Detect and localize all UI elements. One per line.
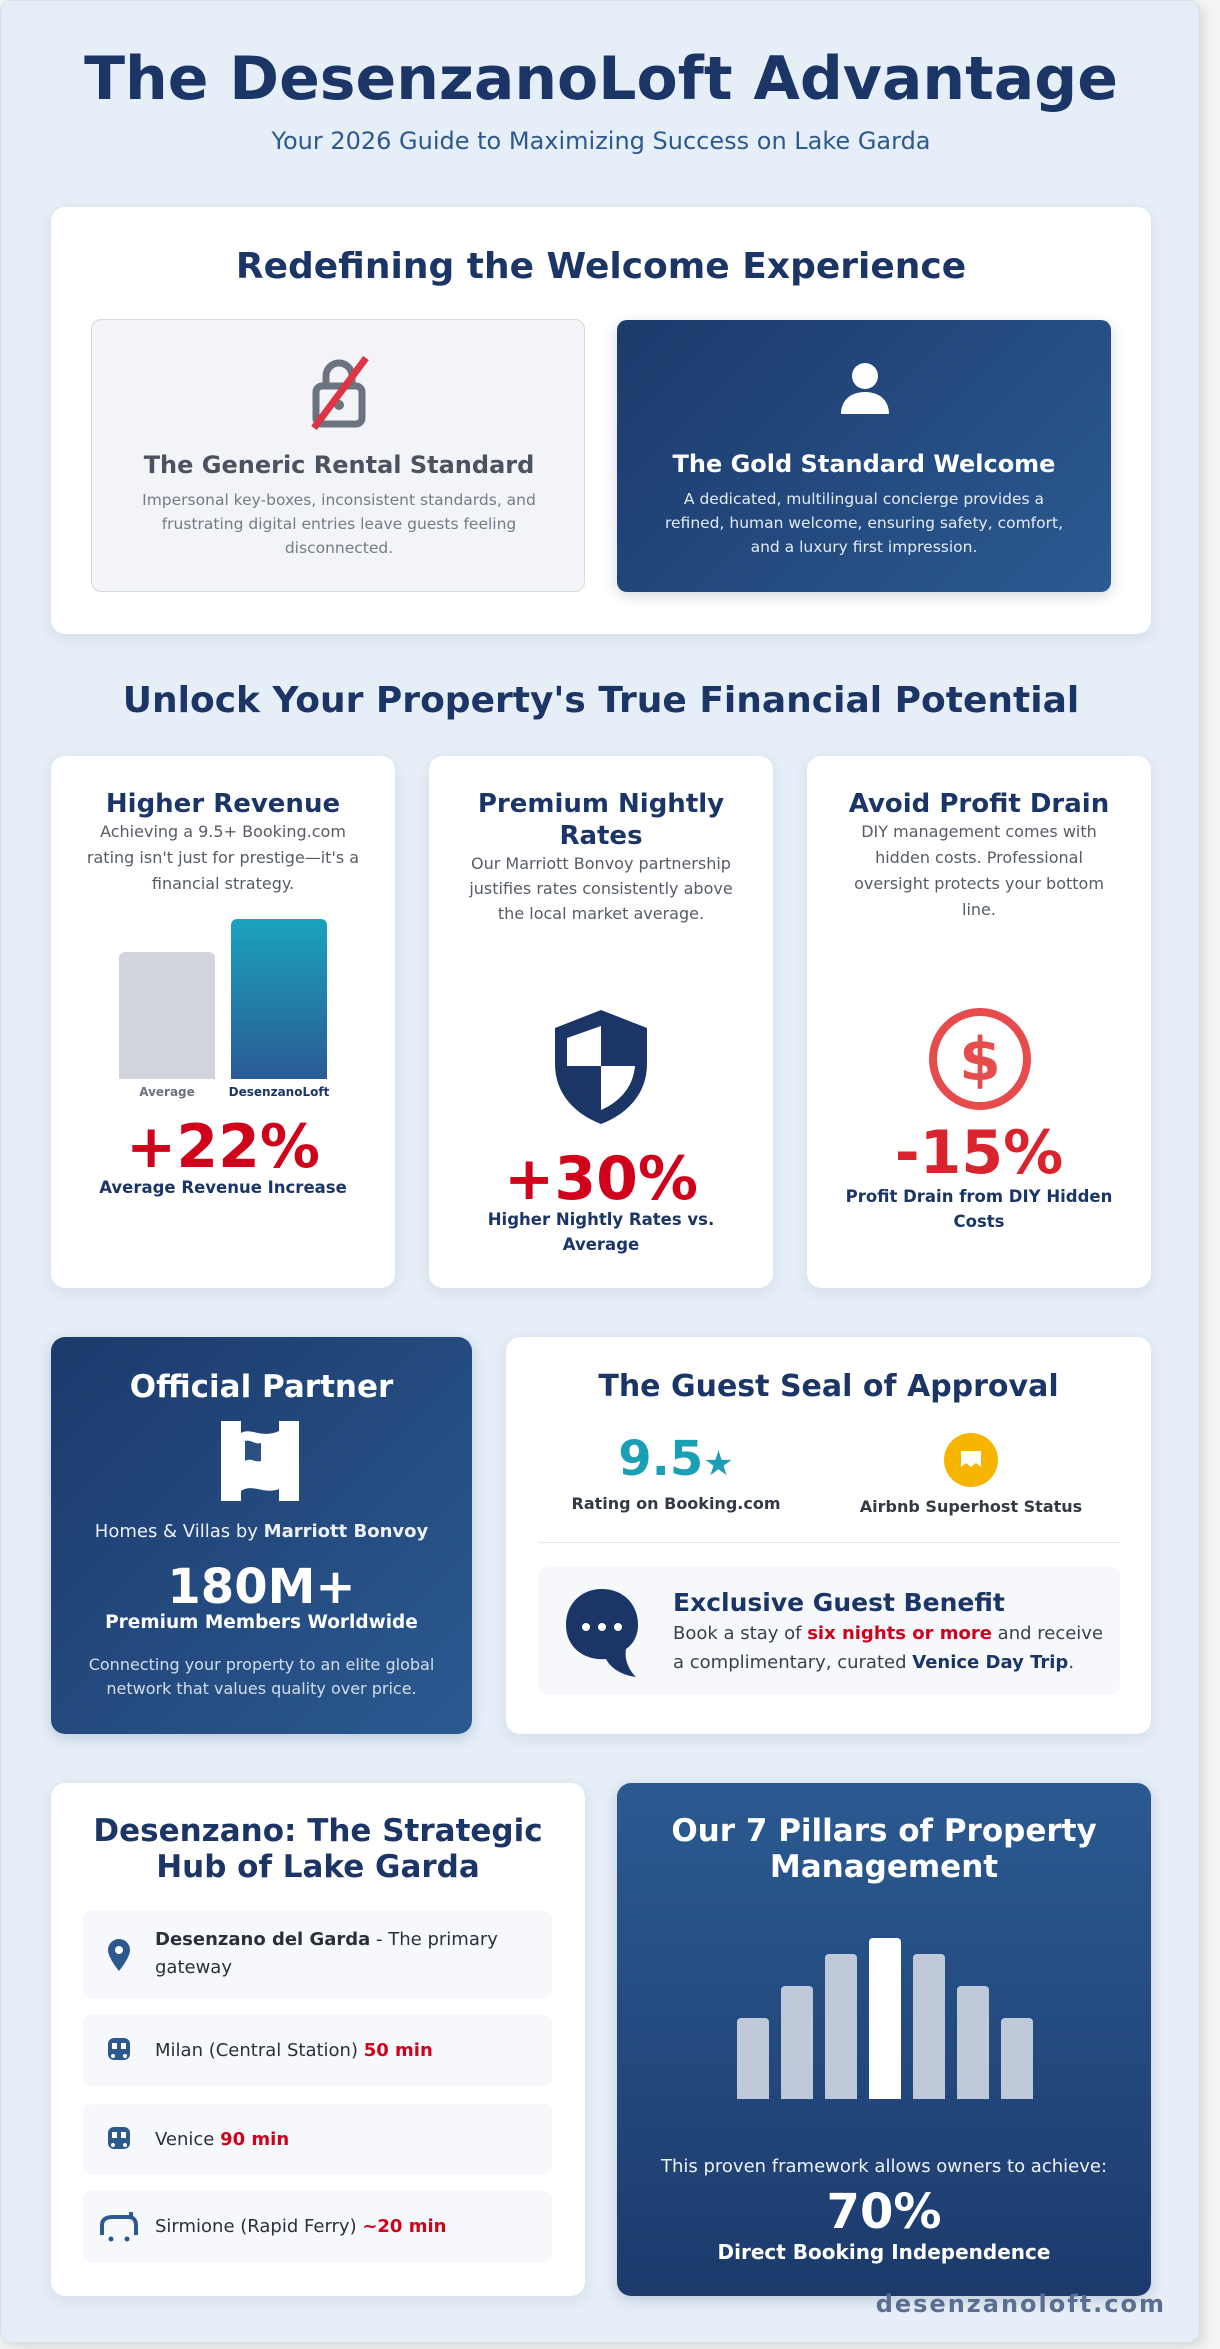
item: desenzano: Desenzano del Garda - The primary gateway (155, 1929, 498, 1978)
subtitle: Your 2026 Guide to Maximizing Success on Lake Garda (271, 127, 931, 155)
panel: official partner (51, 1337, 472, 1734)
icon: person (841, 363, 889, 414)
stat: 180M+: 180M+ (167, 1559, 356, 1615)
item: sirmione (83, 2191, 552, 2263)
heading: The Guest Seal of Approval (598, 1369, 1059, 1404)
text: Book a stay of six nights or more and receive a complimentary, curated Venice Day Trip. (673, 1623, 1103, 1673)
item: sirmione: Sirmione (Rapid Ferry) ~20 min (155, 2216, 446, 2237)
caption: Profit Drain from DIY Hidden Costs (846, 1187, 1112, 1231)
heading: Our 7 Pillars of Property Management (671, 1813, 1097, 1885)
bar chart: DesenzanoLoft (229, 1085, 329, 1099)
item: venice (83, 2104, 552, 2175)
icon: shield (555, 1010, 647, 1124)
text: Achieving a 9.5+ Booking.com rating isn't just for prestige—it's a financial strategy. (87, 822, 359, 893)
bar chart: Average (139, 1085, 195, 1099)
title: The DesenzanoLoft Advantage (84, 44, 1118, 114)
icon: dollar (929, 1008, 1031, 1110)
callout: exclusive benefit (538, 1567, 1120, 1695)
caption: Direct Booking Independence (718, 2240, 1050, 2264)
panel: avoid profit drain (807, 756, 1151, 1288)
heading: Desenzano: The Strategic Hub of Lake Garda (93, 1813, 543, 1885)
heading: Premium Nightly Rates (478, 789, 724, 851)
text: marriott: Homes & Villas by Marriott Bonvoy (95, 1521, 428, 1542)
panel: higher revenue (51, 756, 395, 1288)
text: Connecting your property to an elite global network that values quality over price. (89, 1655, 434, 1698)
heading: gold: The Gold Standard Welcome (673, 450, 1055, 478)
text: DIY management comes with hidden costs. Professional oversight protects your bottom line. (854, 822, 1104, 919)
panel: guest seal (506, 1337, 1151, 1734)
panel: 7 pillars (617, 1783, 1151, 2296)
rating (572, 1431, 780, 1513)
rating: 9.5★ (618, 1431, 734, 1487)
stat: -15% (895, 1118, 1063, 1188)
text: gold: A dedicated, multilingual concierge provides a refined, human welcome, ensuring safety, comfort, and a luxury first impression. (665, 490, 1063, 556)
heading: Higher Revenue (106, 789, 340, 819)
item: milan: Milan (Central Station) 50 min (155, 2040, 433, 2061)
chart: pillars (737, 1938, 1033, 2099)
panel: gold standard (617, 320, 1111, 592)
icon: airbnb badge (944, 1433, 998, 1487)
text: This proven framework allows owners to achieve: (661, 2156, 1107, 2177)
text: Our Marriott Bonvoy partnership justifies rates consistently above the local market average. (469, 854, 733, 923)
item: venice: Venice 90 min (155, 2129, 289, 2150)
icon: dollar: $ (959, 1025, 1001, 1095)
heading: financial potential: Unlock Your Property's True Financial Potential (123, 680, 1079, 721)
heading: Exclusive Guest Benefit (673, 1588, 1005, 1617)
item: desenzano (83, 1911, 552, 1999)
superhost (860, 1433, 1082, 1516)
heading: Official Partner (130, 1369, 393, 1405)
superhost: Airbnb Superhost Status (860, 1497, 1082, 1516)
caption: Higher Nightly Rates vs. Average (488, 1210, 714, 1254)
text: generic: Impersonal key-boxes, inconsistent standards, and frustrating digital entries leave guests feeling disconnected. (142, 491, 536, 557)
item: milan (83, 2015, 552, 2086)
icon: crossed lock (311, 356, 369, 430)
panel: welcome experience (51, 207, 1151, 634)
caption: Premium Members Worldwide (105, 1612, 418, 1633)
caption: Average Revenue Increase (99, 1178, 347, 1197)
heading: Avoid Profit Drain (849, 789, 1109, 819)
panel: strategic hub (51, 1783, 585, 2296)
footer: url: desenzanoloft.com (876, 2290, 1166, 2318)
heading: welcome: Redefining the Welcome Experience (236, 246, 966, 287)
heading: generic: The Generic Rental Standard (144, 451, 534, 479)
stat: 70%: 70% (827, 2184, 941, 2240)
icon: marriott (221, 1421, 299, 1501)
bar chart (119, 919, 330, 1099)
icon: speech bubble (566, 1589, 638, 1677)
stat: +30% (504, 1144, 698, 1214)
panel: premium nightly rates (429, 756, 773, 1288)
rating: Rating on Booking.com (572, 1494, 780, 1513)
stat: +22% (126, 1112, 320, 1182)
panel: generic rental (91, 319, 585, 592)
